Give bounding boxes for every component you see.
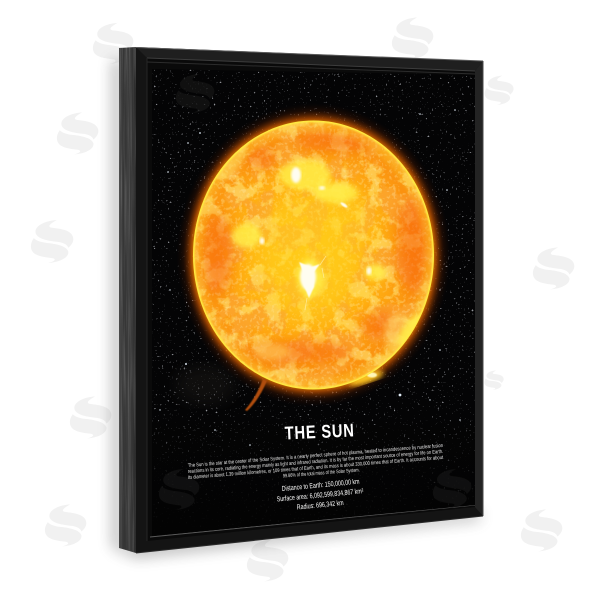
bright yellow flare halos	[232, 160, 430, 351]
limb brightening	[194, 121, 434, 389]
bright flare on sun edge	[367, 372, 377, 378]
frame right moulding	[475, 61, 483, 516]
stat: radius: Radius: 696,342 km	[296, 498, 344, 511]
poster artwork	[150, 66, 480, 541]
flare lower right	[347, 368, 385, 388]
star field	[150, 66, 480, 541]
yellow patches	[190, 118, 438, 392]
bright rim line	[194, 121, 434, 389]
stat: surface area: Surface area: 6,092,599,834,867 km²	[276, 486, 364, 503]
frame highlights	[136, 48, 483, 553]
description text: reactions in its core, radiating the energy mainly as light and infrared radiation. It is by far the most important source of energy for life on Earth.	[188, 449, 443, 475]
bright stars	[159, 109, 461, 446]
central yellow brightening	[258, 193, 371, 317]
deep orange regions	[203, 133, 428, 363]
frame drop shadow	[112, 60, 480, 558]
fine grain	[190, 118, 438, 392]
description text: 99.86% of the total mass of the Solar System.	[283, 467, 360, 479]
space background	[198, 504, 475, 532]
frame top moulding	[137, 48, 483, 71]
title: THE SUN	[284, 419, 355, 443]
pale lower rim	[212, 136, 412, 360]
frame front face	[136, 47, 483, 553]
faint nebula smudge	[175, 365, 235, 405]
picture frame	[119, 47, 483, 553]
description text: Its diameter is about 1.39 million kilometres, or 109 times that of Earth, and its mass is about 330,000 times that of Earth. It accounts for about	[188, 455, 444, 481]
orange granulation	[190, 118, 438, 392]
stat: distance to Earth: Distance to Earth: 150,000,00 km	[281, 477, 360, 493]
faint watermark logos on art	[159, 74, 471, 510]
frame inner recess	[147, 58, 475, 541]
description text	[188, 443, 444, 481]
description text: The Sun is the star at the center of the Solar System. It is a nearly perfect sphere of hot plasma, heated to incandescence by nuclear fusion	[188, 443, 443, 469]
lower fade	[152, 414, 475, 536]
white hot active regions	[260, 167, 372, 310]
solar prominence lower left	[245, 379, 267, 411]
solar glow	[176, 103, 450, 407]
frame side face	[119, 47, 136, 553]
sun disc	[190, 118, 438, 392]
